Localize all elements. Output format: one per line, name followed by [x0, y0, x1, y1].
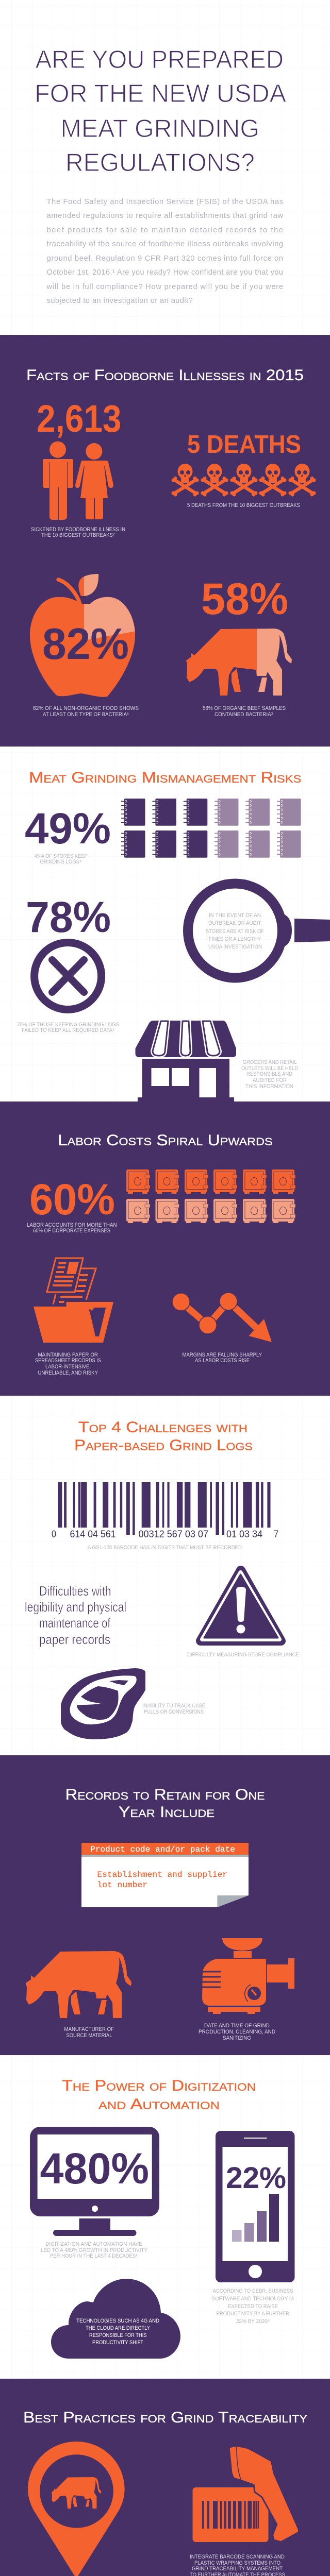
heading: records: Records to Retain for One [65, 1786, 265, 1803]
note card [81, 1843, 249, 1907]
handwritten text block: paper records [39, 1632, 110, 1647]
caption: paper records: SPREADSHEET RECORDS IS [35, 1358, 101, 1364]
stat: 5 deaths: 5 DEATHS [187, 431, 301, 459]
title [35, 46, 286, 177]
title: ARE YOU PREPARED [36, 46, 284, 74]
icon: cloud with text: TECHNOLOGIES SUCH AS 4G AND [76, 2318, 159, 2324]
caption: integrate: INTEGRATE BARCODE SCANNING AND [190, 2554, 285, 2560]
caption: store: OUTLETS WILL BE HELD [241, 1065, 298, 1072]
callout: magnifier text: OUTBREAK OR AUDIT, [208, 920, 262, 926]
heading: best practices: Best Practices for Grind Traceability [23, 2409, 307, 2426]
intro paragraph: October 1st, 2016.¹ Are you ready? How confident are you that you [47, 268, 283, 277]
caption: steak: PULLS OR CONVERSIONS [144, 1709, 204, 1715]
caption: paper records: MAINTAINING PAPER OR [38, 1352, 98, 1358]
caption: paper records: UNRELIABLE, AND RISKY [38, 1370, 98, 1376]
callout: magnifier text: IN THE EVENT OF AN [209, 912, 261, 919]
caption: sickened [31, 527, 125, 538]
intro paragraph: amended regulations to require all establishments that grind raw [47, 212, 284, 220]
icon: phone with 22 percent chart: 22% [226, 2161, 286, 2195]
caption: margins [183, 1352, 262, 1364]
heading: labor: Labor Costs Spiral Upwards [58, 1132, 273, 1149]
caption: 58 percent [203, 705, 286, 718]
caption: 480 percent [41, 2241, 147, 2259]
icon: cloud with text [51, 2279, 180, 2359]
caption: 82 percent: 82% OF ALL NON-ORGANIC FOOD SHOWS [33, 705, 139, 711]
callout: magnifier text: STORES ARE AT RISK OF [206, 928, 264, 935]
stat: 60 percent: 60% [29, 1175, 115, 1224]
icon: cloud with text: PRODUCTIVITY SHIFT [92, 2340, 143, 2346]
caption: 78 percent [17, 1022, 119, 1033]
caption: manufacturer [64, 2026, 114, 2039]
caption: barcode: A GS1-128 BARCODE HAS 24 DIGITS THAT MUST BE RECORDED [88, 1545, 242, 1551]
heading: challenges: Top 4 Challenges with [78, 1419, 248, 1436]
caption: store: RESPONSIBLE AND [246, 1071, 292, 1077]
chart: barcode: 614 04 561 [70, 1529, 116, 1540]
caption: grind date [199, 2023, 275, 2041]
panel: mismanagement risks [0, 747, 330, 1101]
caption: 78 percent: 78% OF THOSE KEEPING GRINDING LOGS [17, 1022, 119, 1028]
heading: records [65, 1786, 265, 1821]
icon: five skulls [171, 464, 316, 497]
heading: risks: Meat Grinding Mismanagement Risks [29, 769, 301, 786]
caption: store: THIS INFORMATION [245, 1083, 293, 1090]
caption: deaths: 5 DEATHS FROM THE 10 BIGGEST OUTBREAKS [187, 502, 300, 509]
icon: man and woman [43, 442, 113, 520]
icon: circle with X [35, 943, 102, 1010]
intro paragraph: subjected to an investigation or an audit? [47, 297, 193, 305]
caption: manufacturer: SOURCE MATERIAL [66, 2032, 112, 2039]
panel: records to retain [0, 1755, 330, 2055]
icon: meat grinder [201, 1938, 295, 2014]
title: MEAT GRINDING [61, 115, 259, 143]
caption: 22 percent: PRODUCTIVITY BY A FURTHER [217, 2311, 289, 2317]
handwritten text block: legibility and physical [25, 1599, 126, 1615]
callout: magnifier text: USDA INVESTIGATION [208, 944, 262, 950]
icon: map pin with cow [28, 2442, 125, 2576]
intro paragraph: beef products for sale to maintain detailed records to the [47, 226, 283, 234]
icon: monitor with 480 percent [30, 2127, 159, 2236]
caption: 49 percent [34, 853, 88, 865]
chart: barcode: 0 [52, 1529, 56, 1540]
caption: steak: INABILITY TO TRACK CASE [142, 1703, 205, 1709]
chart: barcode: 00312 567 03 07 [138, 1529, 208, 1540]
handwritten text block: maintenance of [39, 1615, 111, 1631]
note card: Product code and/or pack date [90, 1845, 235, 1854]
icon: cow [26, 1951, 131, 2018]
caption: 78 percent: FAILED TO KEEP ALL REQUIRED DATA⁴ [22, 1027, 114, 1033]
icon: warning triangle [201, 1570, 281, 1641]
handwritten text block: Difficulties with [39, 1583, 111, 1599]
caption: sickened: SICKENED BY FOODBORNE ILLNESS IN [31, 527, 125, 533]
icon: apple with 82 percent [30, 574, 135, 697]
caption: 480 percent: LED TO A 480% GROWTH IN PRODUCTIVITY [41, 2247, 147, 2253]
chart: barcode [52, 1482, 278, 1540]
icon: store [135, 1021, 236, 1101]
caption: paper records [35, 1352, 101, 1376]
icon: cloud with text: THE CLOUD ARE DIRECTLY [86, 2325, 150, 2331]
caption: grind date: SANITIZING [223, 2035, 251, 2041]
heading: facts: Facts of Foodborne Illnesses in 2015 [26, 367, 304, 384]
caption: margins: AS LABOR COSTS RISE [195, 1358, 250, 1364]
heading: digitization: The Power of Digitization [62, 2077, 256, 2094]
caption: 22 percent: EXPECTED TO RAISE [228, 2303, 278, 2310]
panel: power of digitization [0, 2055, 330, 2379]
panel: intro [0, 0, 330, 335]
caption: 22 percent [212, 2288, 294, 2325]
caption: 58 percent: 58% OF ORGANIC BEEF SAMPLES [203, 705, 286, 711]
icon: notebooks grid [121, 799, 301, 858]
caption: 60 percent [27, 1222, 117, 1234]
note card: Establishment and supplier [97, 1870, 227, 1879]
heading: digitization: and Automation [98, 2096, 220, 2113]
caption: grind date: DATE AND TIME OF GRIND [204, 2023, 270, 2029]
caption: 480 percent: PER HOUR IN THE LAST 4 DECADES⁶ [50, 2253, 138, 2259]
handwritten text block [25, 1583, 126, 1647]
caption: 82 percent: AT LEAST ONE TYPE OF BACTERIA⁶ [43, 711, 129, 718]
chart: barcode: 01 03 34 [226, 1529, 262, 1540]
icon: cloud with text: RESPONSIBLE FOR THIS [89, 2332, 146, 2338]
icon: folder with papers [34, 1258, 113, 1343]
intro paragraph: traceability of the source of foodborne illness outbreaks involving [47, 240, 283, 248]
heading: records: Year Include [119, 1804, 214, 1821]
caption: 58 percent: CONTAINED BACTERIA³ [214, 711, 273, 718]
caption: manufacturer: MANUFACTURER OF [64, 2026, 114, 2032]
caption: grind date: PRODUCTION, CLEANING, AND [199, 2029, 275, 2035]
panel: best practices [0, 2379, 330, 2576]
icon: apple with 82 percent: 82% [42, 620, 129, 669]
stat: 2,613: 2,613 [37, 397, 122, 440]
caption: 22 percent: 22% BY 2020⁶ [236, 2318, 270, 2325]
caption: integrate [190, 2554, 285, 2576]
callout: magnifier text [206, 912, 264, 950]
caption: integrate: GRIND TRACEABILITY MANAGEMENT [192, 2566, 283, 2572]
heading: digitization [62, 2077, 256, 2113]
caption: 480 percent: DIGITIZATION AND AUTOMATION HAVE [45, 2241, 142, 2247]
chart: barcode: 7 [274, 1529, 278, 1540]
intro paragraph: will be in full compliance? How prepared will you be if you were [46, 283, 283, 291]
stat: 78 percent: 78% [26, 893, 111, 941]
caption: sickened: THE 10 BIGGEST OUTBREAKS² [41, 532, 114, 538]
icon: cow split [186, 629, 292, 696]
panel: facts of foodborne illnesses [0, 335, 330, 747]
note card: lot number [97, 1880, 147, 1890]
stat: 58 percent: 58% [201, 574, 288, 624]
intro paragraph: The Food Safety and Inspection Service (FSIS) of the USDA has [47, 198, 283, 206]
caption: 60 percent: LABOR ACCOUNTS FOR MORE THAN [27, 1222, 117, 1228]
caption: integrate: PLASTIC WRAPPING SYSTEMS INTO [194, 2560, 280, 2566]
panel: top 4 challenges [0, 1396, 330, 1755]
icon: magnifying glass [188, 884, 330, 978]
title: REGULATIONS? [65, 149, 255, 177]
caption: store [241, 1059, 298, 1090]
icon: monitor with 480 percent: 480% [40, 2144, 149, 2193]
icon: falling margin arrow [172, 1292, 272, 1342]
caption: steak [142, 1703, 205, 1715]
title: FOR THE NEW USDA [35, 80, 286, 108]
intro paragraph [46, 198, 284, 305]
caption: 82 percent [33, 705, 139, 718]
callout: magnifier text: FINES OR A LENGTHY [209, 936, 261, 942]
stat: 49 percent: 49% [25, 804, 111, 853]
heading: challenges [74, 1419, 253, 1454]
caption: store: AUDITED FOR [253, 1077, 287, 1083]
caption: 60 percent: 60% OF CORPORATE EXPENSES [33, 1228, 110, 1234]
caption: store: GROCERS AND RETAIL [243, 1059, 297, 1065]
icon: phone with 22 percent chart [216, 2131, 295, 2282]
icon: barcode scanner [193, 2446, 299, 2542]
caption: margins: MARGINS ARE FALLING SHARPLY [183, 1352, 262, 1358]
intro paragraph: ground beef. Regulation 9 CFR Part 320 comes into full force on [47, 255, 283, 263]
icon: steak [61, 1668, 145, 1739]
icon: safes grid [126, 1170, 295, 1223]
heading: challenges: Paper-based Grind Logs [74, 1437, 253, 1454]
caption: 49 percent: GRINDING LOGS⁴ [40, 859, 81, 865]
caption: 22 percent: ACCORDING TO CEBR, BUSINESS [213, 2288, 293, 2294]
caption: 49 percent: 49% OF STORES KEEP [34, 853, 88, 859]
caption: 22 percent: SOFTWARE AND TECHNOLOGY IS [212, 2296, 294, 2302]
caption: paper records: LABOR-INTENSIVE, [45, 1364, 91, 1370]
panel: labor costs [0, 1101, 330, 1396]
caption: compliance: DIFFICULTY MEASURING STORE COMPLIANCE [187, 1652, 299, 1658]
